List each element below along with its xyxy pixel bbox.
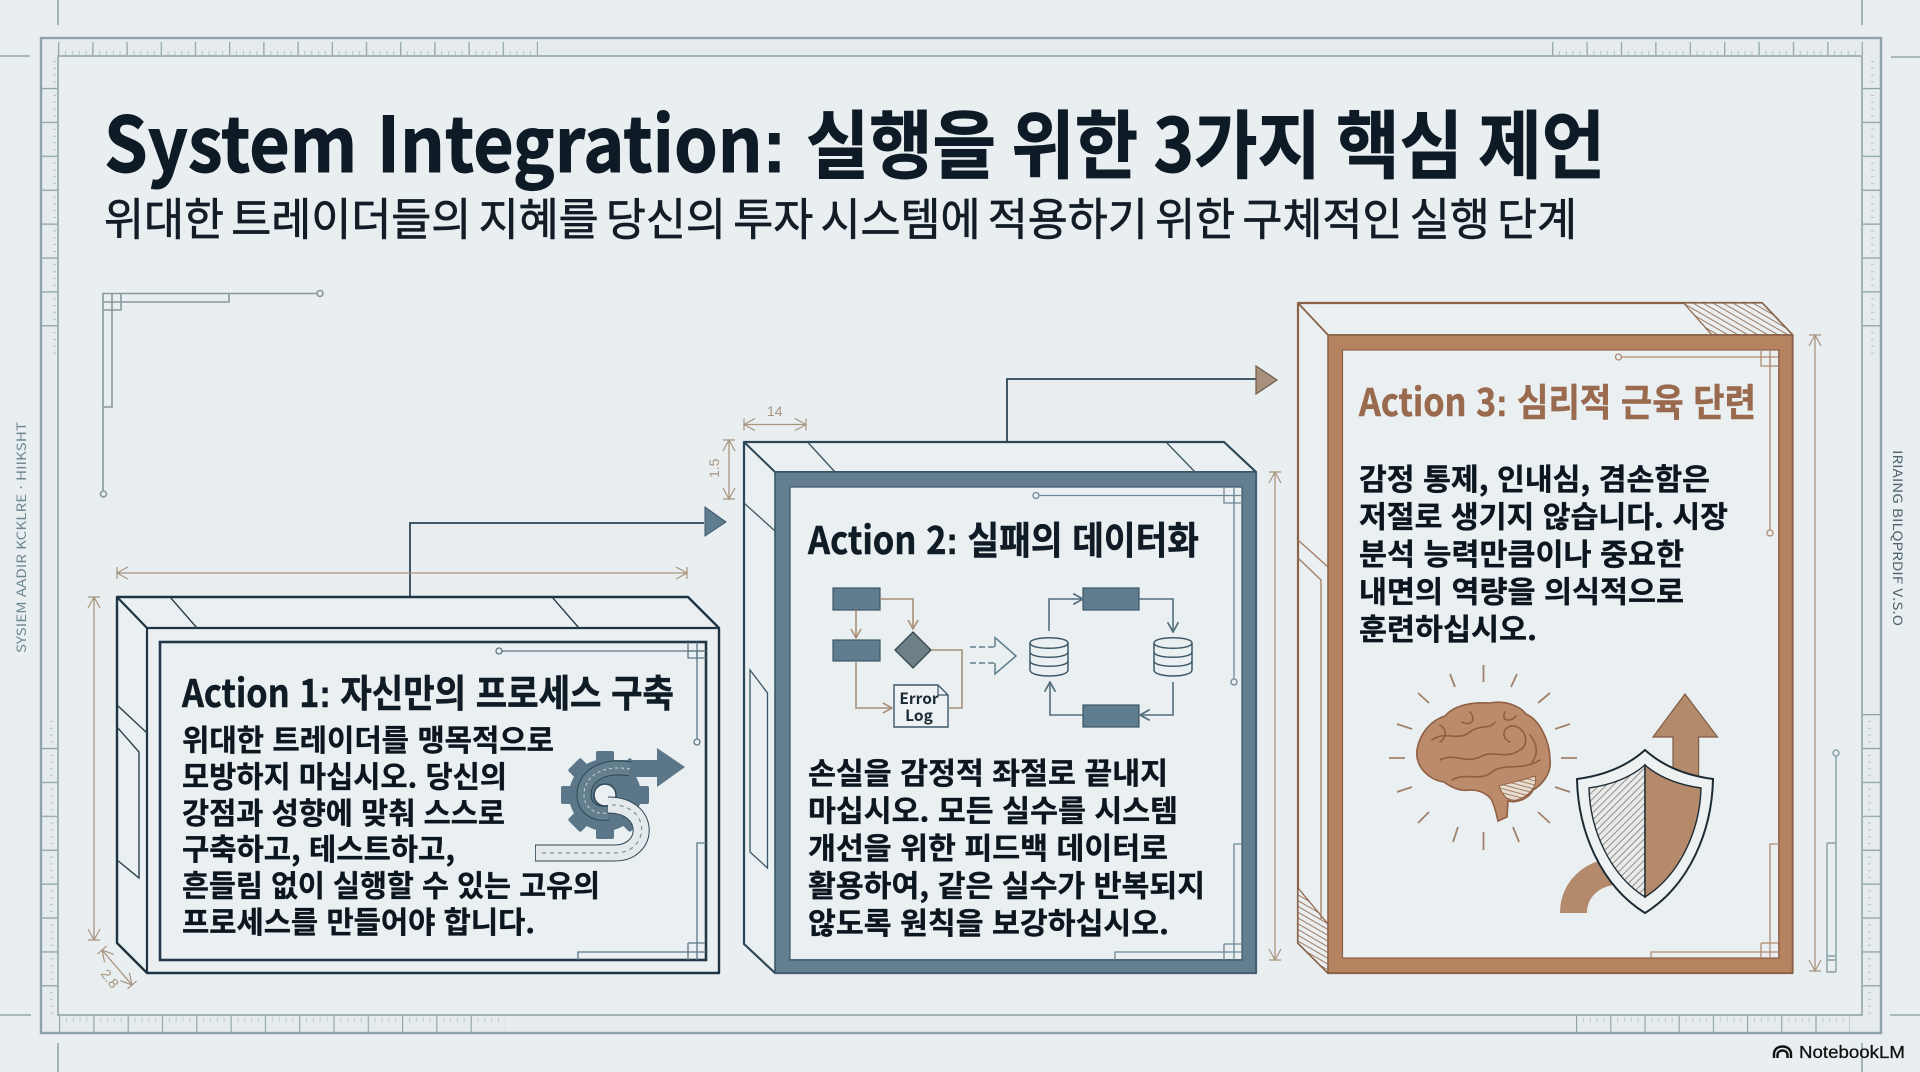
dimension lines: action 2: 1.5 [706,458,722,478]
text block: action 3: 분석 능력만큼이나 중요한 [1359,530,1684,574]
text block: action 3: 감정 통제, 인내심, 겸손함은 [1359,455,1710,499]
heading: action 1: Action 1: 자신만의 프로세스 구축 [181,663,674,718]
connector arrow: action 2 to action 3 [1007,366,1277,442]
diagram: data feedback loop [1030,588,1192,727]
icon: shield with rising arrow [1574,694,1718,913]
text block: action 1: 구축하고, 테스트하고, [182,825,455,869]
title [104,84,1605,194]
dimension lines: action 2 [706,403,1275,960]
text block: action 1: 흔들림 없이 실행할 수 있는 고유의 [182,862,600,906]
logo: NotebookLM: NotebookLM [1799,1042,1905,1062]
text block: action 1: 모방하지 마십시오. 당신의 [182,752,507,796]
icon: gear with road and arrow [535,748,685,853]
flowchart: error to log [833,588,962,727]
panel: action 2 [744,442,1256,973]
text block: action 3: 훈련하십시오. [1359,605,1537,649]
text block: action 1 [182,716,600,942]
title: 실행을 위한 3가지 핵심 제언 [806,87,1605,194]
heading: action 3: Action 3: 심리적 근육 단련 [1358,372,1756,427]
text block: action 3: 저절로 생기지 않습니다. 시장 [1359,492,1728,536]
decorative bracket: bottom right [1827,750,1839,972]
icon: dashed transition arrow [970,638,1016,674]
connector arrow: action 1 to action 2 [410,507,726,597]
text block: action 3: 내면의 역량을 의식적으로 [1359,568,1684,612]
text block: action 2: 않도록 원칙을 보강하십시오. [808,899,1169,943]
text block: action 2: 개선을 위한 피드백 데이터로 [808,824,1168,868]
text block: action 1: 위대한 트레이더를 맹목적으로 [182,716,554,760]
heading: action 2: Action 2: 실패의 데이터화 [807,510,1199,565]
text block: action 2: 손실을 감정적 좌절로 끝내지 [808,749,1168,793]
text block: action 1: 프로세스를 만들어야 합니다. [182,898,535,942]
subtitle: 위대한 트레이더들의 지혜를 당신의 투자 시스템에 적용하기 위한 구체적인 실행 단계 [104,183,1577,248]
text block: action 2: 활용하여, 같은 실수가 반복되지 [808,862,1205,906]
title: System Integration: [104,84,786,194]
decorative corner bracket [100,290,323,497]
panel: action 3 [1298,303,1792,973]
flowchart: error to log: Error [899,687,939,709]
dimension lines: action 1 [94,573,687,991]
right margin label: IRIAING BILQPRDIF V.S.O [1889,450,1908,626]
dimension lines: action 1: 2.8 [98,966,122,991]
text block: action 1: 강점과 성향에 맞춰 스스로 [182,789,505,833]
dimension lines: action 2: 14 [767,403,783,419]
text block: action 2: 마십시오. 모든 실수를 시스템 [808,786,1178,830]
left margin label: SYSIEM AADIR KCKLRE · HIIKSHT [11,422,30,653]
icon: brain with rays [1389,665,1577,850]
panel: action 1 [117,597,719,973]
flowchart: error to log: Log [905,704,933,726]
text block: action 3 [1359,455,1728,649]
text block: action 2 [808,749,1205,943]
dimension line: action 3 [1814,335,1816,971]
